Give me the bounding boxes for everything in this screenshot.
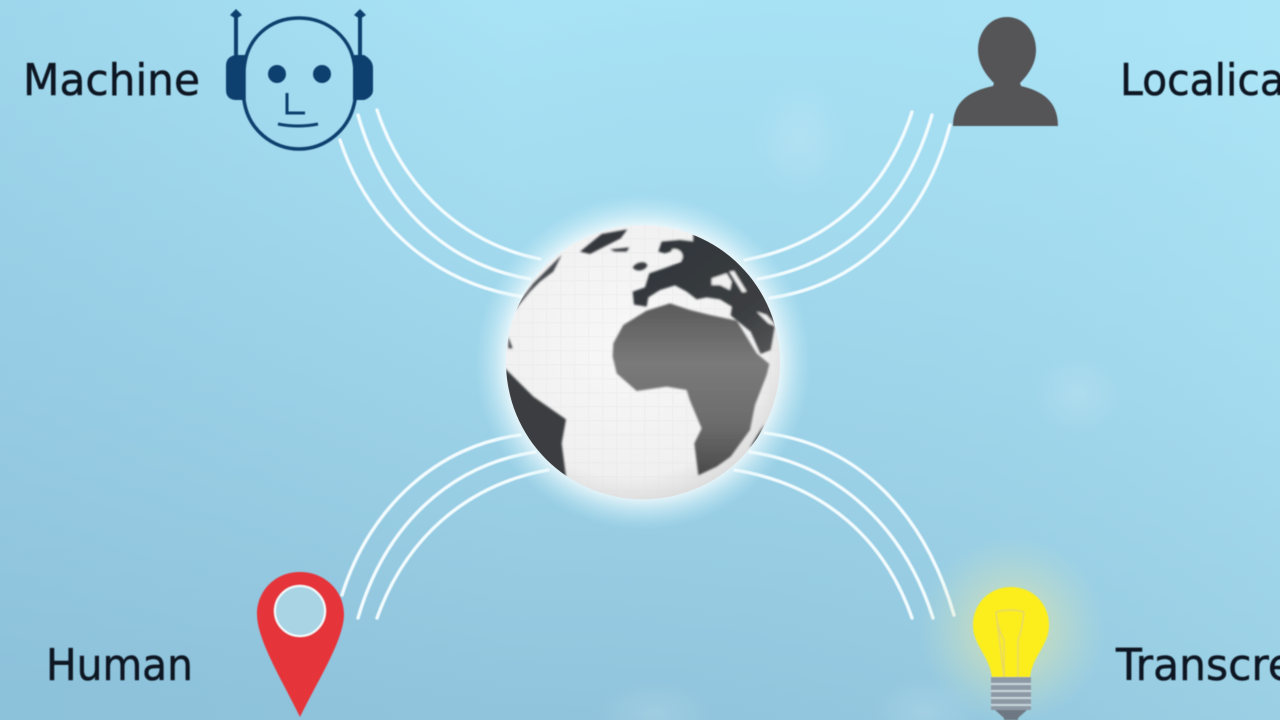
node: Human [46,572,344,717]
icon: robot head with headset [226,9,373,149]
globe [475,194,811,530]
land: Africa [613,303,769,475]
connector arcs [340,110,954,618]
land: Greenland [580,229,627,254]
arcs: top right [745,112,950,298]
node: Machine [23,9,373,149]
icon: person silhouette [953,17,1058,126]
label: Human: Human [46,640,193,691]
land: North America edge [508,255,562,348]
arcs: top left [340,110,540,297]
node: Localization [953,17,1280,126]
globe halo [475,194,811,530]
globe sphere and continents [503,225,790,499]
label: Machine: Machine [23,55,200,106]
node: Transcreation [917,535,1280,720]
bulb glow [917,535,1107,720]
land: South America [503,367,566,477]
icon: map pin [257,572,344,717]
land: Europe and Asia [633,233,790,354]
icon: light bulb [973,587,1049,720]
arcs: bottom left [342,435,548,618]
arcs: bottom right [735,433,954,618]
land: Madagascar [749,424,764,448]
